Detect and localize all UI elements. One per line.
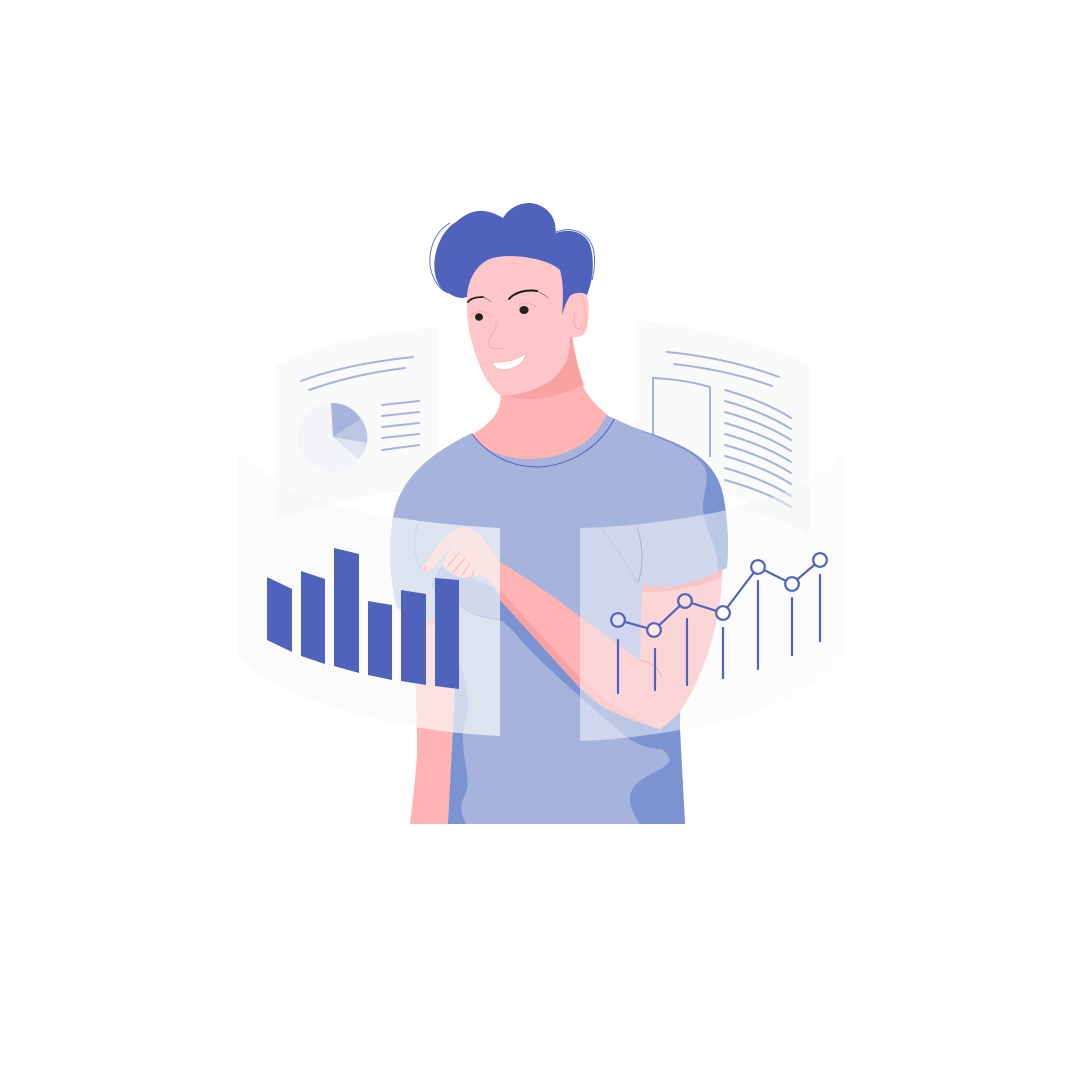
panel: front left curved glass <box>238 450 500 736</box>
elbow crease <box>640 660 662 677</box>
data points <box>611 553 827 637</box>
forearm shadow band <box>500 590 660 729</box>
eyes <box>475 306 529 321</box>
head <box>467 256 589 395</box>
pie chart <box>298 402 368 472</box>
ear detail <box>574 295 586 332</box>
text lines: right page column <box>725 390 791 507</box>
smile <box>492 353 526 370</box>
shirt shadow: left side <box>448 650 468 824</box>
trend line <box>618 560 820 630</box>
hair outline accents <box>430 223 595 293</box>
panel: back left report page <box>276 327 437 520</box>
vertical stems <box>618 575 820 693</box>
collar line <box>472 419 614 467</box>
line chart <box>611 553 827 693</box>
sleeve fold lines <box>415 520 642 620</box>
sleeve hem shadow <box>642 569 722 592</box>
t-shirt <box>390 415 728 824</box>
bar chart <box>267 548 459 689</box>
panel: front right curved glass <box>580 450 843 741</box>
heading lines: right page <box>667 352 779 386</box>
neck <box>470 335 610 460</box>
panel: back right report page <box>636 320 809 535</box>
panel overlap: right page behind glass <box>725 481 809 535</box>
hair <box>434 203 593 316</box>
image placeholder <box>653 378 710 457</box>
shirt shadow: right shoulder <box>635 428 728 570</box>
heading lines: left page <box>301 357 413 390</box>
person: man <box>390 203 728 824</box>
fingernail and knuckle lines <box>424 552 473 578</box>
shirt shadow: under arm and waist <box>432 566 685 824</box>
eyebrows <box>468 290 548 302</box>
text lines: pie legend <box>382 401 419 450</box>
neck shadow <box>510 335 584 399</box>
right upper arm and forearm <box>500 562 722 729</box>
panel overlap: left page behind glass <box>276 485 333 520</box>
cuff shadow on left arm <box>415 617 458 625</box>
nose and eyelids <box>470 303 537 349</box>
hand pointing at chart <box>423 527 500 595</box>
left arm (viewer's left) <box>410 610 460 824</box>
